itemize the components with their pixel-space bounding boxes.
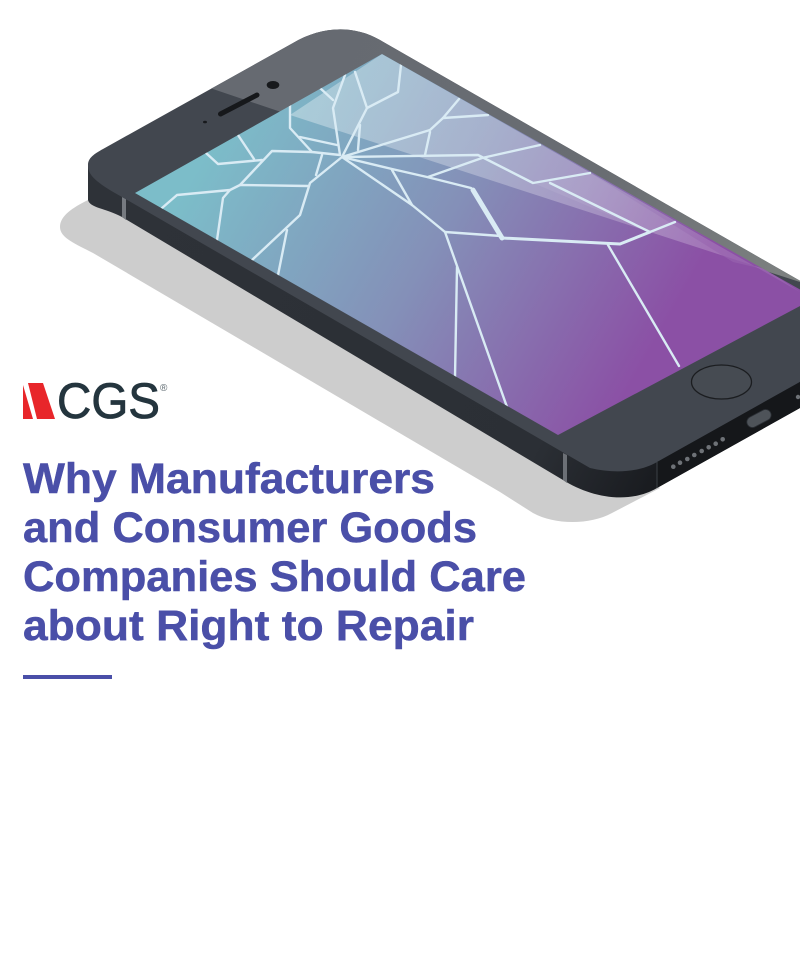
sensor dot <box>203 121 207 123</box>
screen cracks <box>162 65 679 407</box>
phone drop shadow <box>60 200 660 522</box>
speaker grille dots <box>671 437 725 469</box>
front camera <box>267 81 279 89</box>
logo: CGS <box>23 373 168 429</box>
title rule <box>23 675 112 679</box>
side screw dot <box>796 395 800 399</box>
title: Why Manufacturers <box>23 455 435 503</box>
registered mark: ® <box>160 383 168 394</box>
title: and Consumer Goods <box>23 504 477 552</box>
logo wordmark: CGS <box>57 373 160 429</box>
home button <box>692 365 752 399</box>
phone front frame <box>88 29 800 471</box>
charging port <box>745 408 773 429</box>
speaker slot <box>220 95 257 114</box>
phone side wall <box>88 165 800 497</box>
frame glare <box>210 20 800 282</box>
logo mark <box>23 383 55 419</box>
screen glare <box>290 54 800 292</box>
title: Companies Should Care <box>23 553 526 601</box>
title <box>23 455 526 650</box>
screen <box>135 54 800 435</box>
title: about Right to Repair <box>23 602 474 650</box>
illustration: smartphone with cracked screen <box>88 20 800 497</box>
